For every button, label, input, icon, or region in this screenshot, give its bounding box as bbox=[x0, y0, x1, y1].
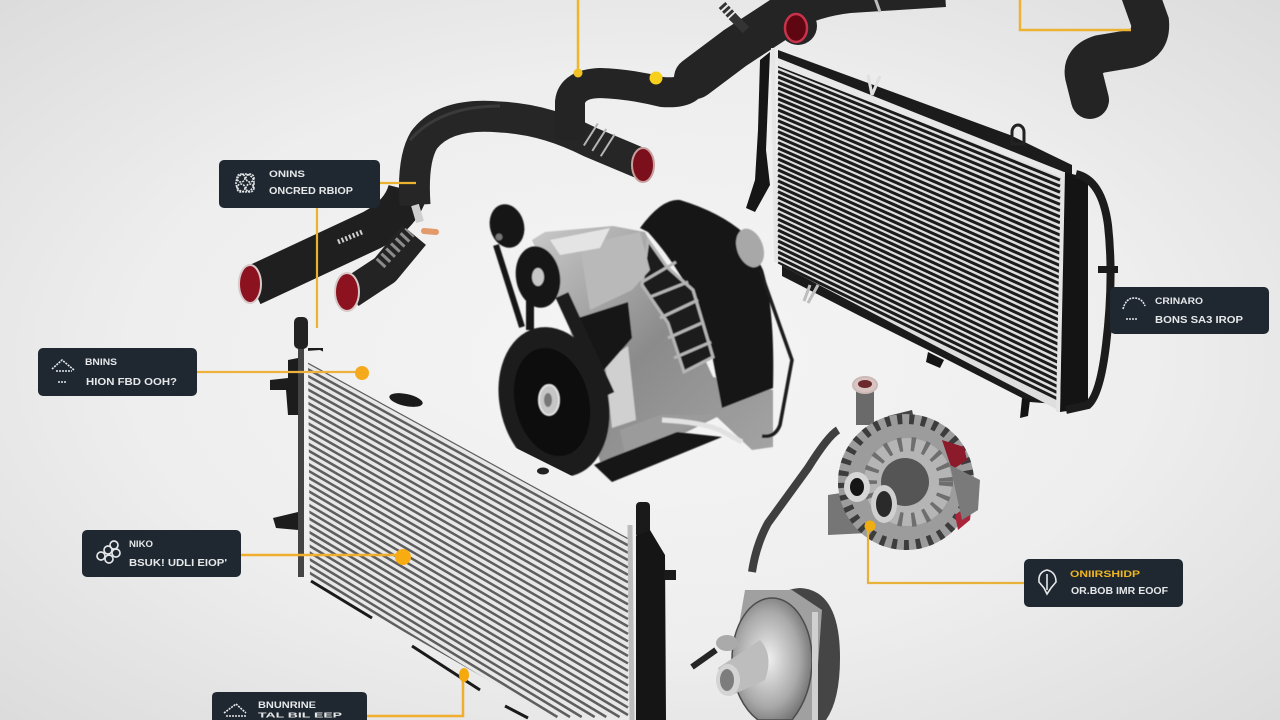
radiator: upper right bbox=[746, 48, 1118, 418]
label: left top bbox=[38, 348, 197, 396]
connector: left radiator centre bbox=[241, 549, 411, 565]
dark section near pulley bbox=[578, 302, 632, 378]
label: hoses bbox=[219, 160, 380, 208]
icon: hose label cluster bbox=[236, 174, 254, 192]
water pump assembly bbox=[692, 377, 980, 720]
label: pump bbox=[1024, 559, 1183, 607]
black fan housing bbox=[640, 200, 773, 408]
connector: left radiator bottom bbox=[367, 668, 469, 716]
label: pump: OR.BOB IMR EOOF bbox=[1071, 586, 1168, 597]
pipe bbox=[752, 430, 838, 572]
icon: right radiator bbox=[1123, 298, 1145, 319]
label: pump: ONIIRSHIDP bbox=[1070, 569, 1140, 579]
alternator / engine unit bbox=[483, 200, 792, 489]
label: bottom bbox=[212, 692, 367, 720]
connector: pump bbox=[864, 520, 1024, 583]
vacuum bell bbox=[760, 588, 840, 720]
small pulleys bbox=[485, 200, 529, 252]
icon: pump bbox=[1039, 570, 1056, 594]
label: right radiator: CRINARO bbox=[1155, 296, 1203, 306]
bracket bbox=[828, 493, 868, 535]
connector: hose label bbox=[317, 183, 416, 328]
rear bump bbox=[888, 410, 916, 430]
pump stem bbox=[856, 385, 874, 425]
label: hoses: ONCRED RBIOP bbox=[269, 186, 353, 197]
gear body bbox=[838, 414, 974, 550]
red fins bbox=[942, 440, 967, 470]
hose: upper left pair with red ends bbox=[239, 106, 654, 311]
label: bottom: TAL BIL EEP bbox=[258, 713, 343, 720]
label: bottom: BNUNRINE bbox=[258, 700, 316, 710]
label: left top: BNINS bbox=[85, 357, 117, 367]
radiator: lower left bbox=[270, 317, 676, 720]
label: right radiator bbox=[1110, 287, 1269, 334]
fins: lower radiator bbox=[307, 362, 628, 717]
thin tube bbox=[760, 270, 792, 436]
icon: tube bundle bbox=[97, 541, 120, 563]
white tube bbox=[662, 420, 742, 442]
label: left centre: NIKO bbox=[129, 539, 153, 549]
connector: left radiator top bbox=[197, 366, 369, 380]
icon: bottom radiator bbox=[224, 704, 246, 716]
cooling fins bbox=[642, 240, 713, 372]
belt bbox=[496, 245, 522, 327]
fins: upper radiator bbox=[778, 66, 1060, 400]
label: left centre bbox=[82, 530, 241, 577]
cap bbox=[731, 225, 769, 271]
main pulley bbox=[483, 315, 625, 489]
connector: top right bbox=[1020, 0, 1131, 30]
hose: top right bbox=[1084, 0, 1150, 100]
white highlights bbox=[580, 232, 650, 310]
label: left top: HION FBD OOH? bbox=[86, 377, 177, 388]
hose: top centre bbox=[570, 0, 945, 140]
icon: radiator label cluster bbox=[52, 360, 74, 382]
connector: top centre line and dots bbox=[574, 0, 662, 84]
black base bbox=[594, 432, 722, 482]
label: hoses: ONINS bbox=[269, 169, 305, 179]
label: left centre: BSUK! UDLI EIOP' bbox=[129, 558, 227, 569]
label: right radiator: BONS SA3 IROP bbox=[1155, 315, 1243, 326]
silver body bbox=[532, 226, 773, 462]
